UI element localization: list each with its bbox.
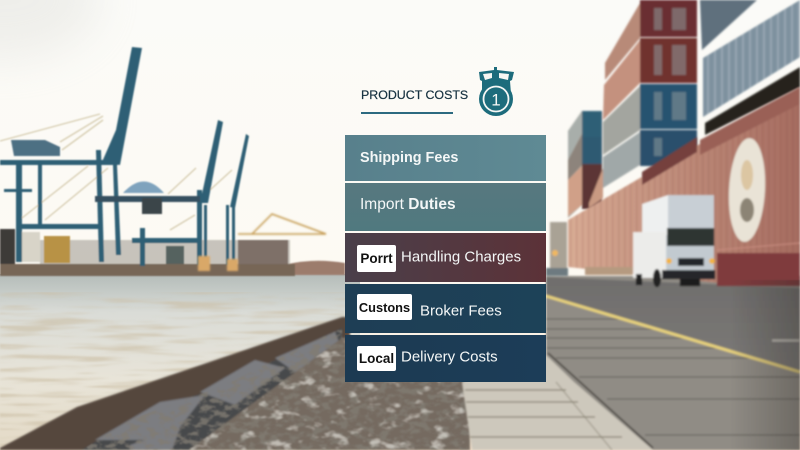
label tag: Custons: Custons [359, 300, 410, 314]
label tag: Custons [357, 294, 412, 320]
road and pavement [462, 276, 800, 450]
row: Import Duties [345, 183, 546, 231]
row: Shipping Fees [345, 135, 546, 181]
icon: ship badge number one: 1 [491, 90, 501, 110]
row: Import Duties: Import Duties [360, 196, 456, 213]
row: Local Delivery Costs: Delivery Costs [401, 348, 498, 366]
row: Local Delivery Costs [345, 335, 546, 382]
heading: Product Costs: PRODUCT COSTS [361, 88, 468, 102]
label tag: Local: Local [359, 351, 394, 366]
row: Port Handling Charges: Handling Charges [401, 248, 521, 266]
distant buildings near road [546, 222, 568, 276]
label tag: Porrt [357, 245, 396, 272]
container stacks [568, 0, 800, 218]
icon: ship badge number one [479, 67, 514, 116]
delivery truck [633, 195, 715, 287]
long container wall with emblem [568, 87, 800, 286]
shore, rock and stone seawall [0, 317, 470, 450]
label tag: Porrt: Porrt [360, 251, 393, 266]
row: Customs Broker Fees [345, 284, 546, 333]
row: Port Handling Charges [345, 233, 546, 282]
row: Shipping Fees: Shipping Fees [360, 150, 458, 166]
edge vignette [730, 280, 800, 450]
water [0, 274, 360, 450]
label tag: Local [357, 346, 396, 371]
row: Customs Broker Fees: Broker Fees [420, 302, 502, 320]
